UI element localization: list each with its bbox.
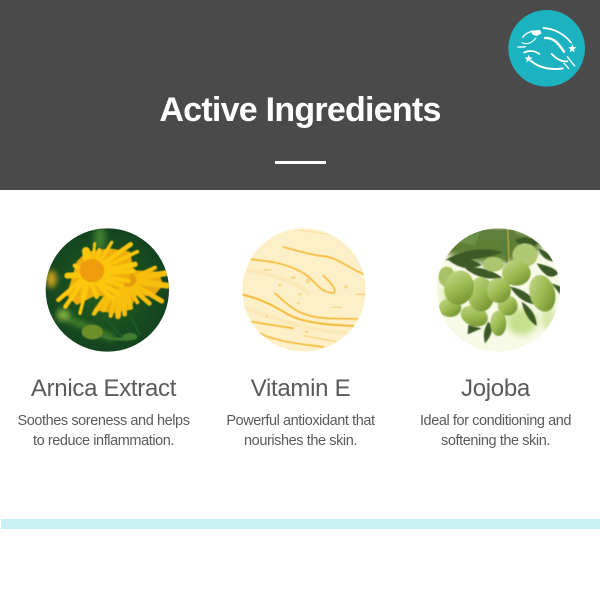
text: Vitamin E description	[226, 413, 375, 449]
photo: vitamin E serum	[242, 228, 366, 352]
text: Jojoba description	[420, 413, 571, 449]
title: Active Ingredients	[159, 91, 441, 129]
text: Arnica description: Soothes soreness and helps	[17, 413, 190, 429]
photo: arnica flower	[46, 228, 169, 352]
text: Arnica description: to reduce inflammation.	[33, 433, 174, 449]
text: Arnica description	[17, 413, 190, 449]
heading: Jojoba: Jojoba	[461, 375, 530, 402]
heading: Arnica Extract: Arnica Extract	[31, 375, 176, 402]
footer accent bar	[1, 519, 600, 529]
photo: jojoba fruit	[436, 228, 560, 352]
icon: leaping bunny badge	[508, 10, 585, 87]
header band	[0, 0, 600, 190]
title underline	[275, 161, 326, 164]
text: Jojoba description: Ideal for conditioning and	[420, 413, 571, 429]
text: Vitamin E description: Powerful antioxidant that	[226, 413, 375, 429]
heading: Vitamin E: Vitamin E	[251, 375, 350, 402]
text: Vitamin E description: nourishes the skin.	[244, 433, 357, 449]
text: Jojoba description: softening the skin.	[441, 433, 550, 449]
